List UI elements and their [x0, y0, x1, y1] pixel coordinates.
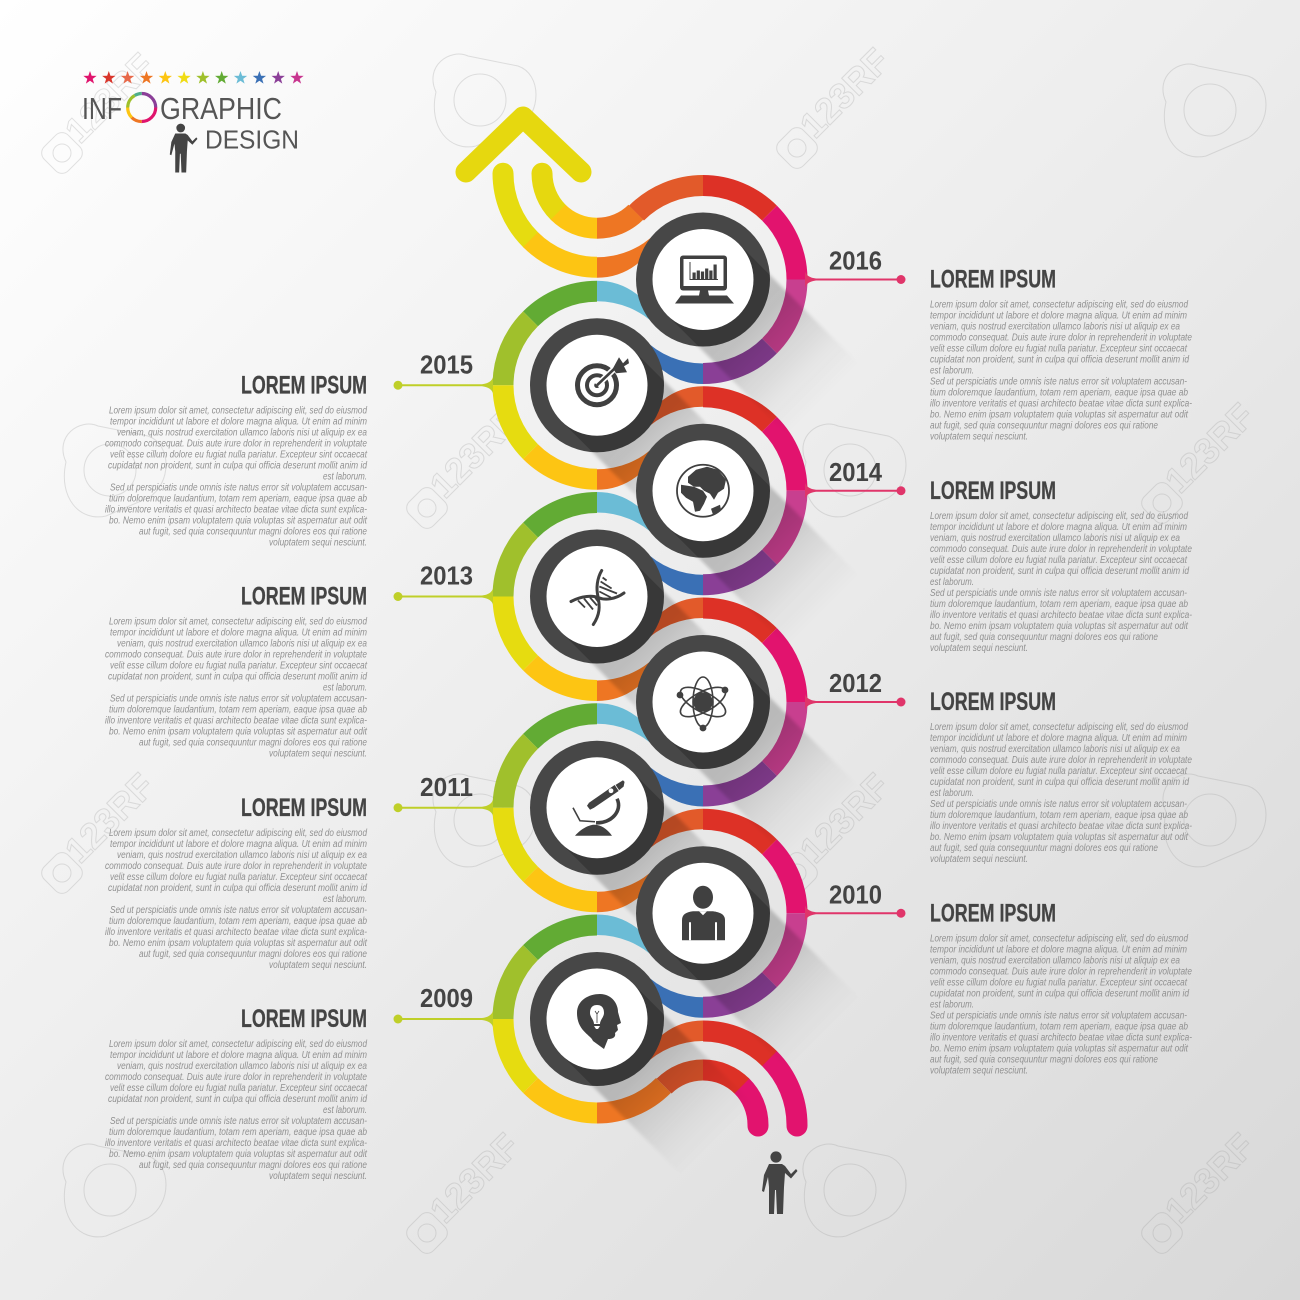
heading 2014: LOREM IPSUM: [930, 477, 1056, 505]
circle: 2011: [530, 741, 689, 900]
body text 2009: tium doloremque laudantium, totam rem aperiam, eaque ipsa quae ab: [109, 1127, 367, 1138]
connector 2010: [805, 905, 906, 921]
body text 2013: [105, 616, 368, 760]
body text 2014: [930, 511, 1193, 654]
ribbon loop 2011: [503, 714, 650, 902]
body text 2011: illo inventore veritatis et quasi architecto beatae vitae dicta sunt explica-: [105, 927, 368, 938]
watermark stamps: 123RF: [1157, 395, 1262, 501]
body text 2013: Sed ut perspiciatis unde omnis iste natus error sit voluptatem accusan-: [110, 694, 368, 704]
body text 2011: [105, 828, 368, 971]
heading 2009: LOREM IPSUM: [241, 1005, 367, 1033]
body text 2015: bo. Nemo enim ipsam voluptatem quia voluptas sit aspernatur aut odit: [109, 515, 368, 526]
body text 2016: tium doloremque laudantium, totam rem aperiam, eaque ipsa quae ab: [930, 388, 1188, 398]
logo word DESIGN: DESIGN: [205, 124, 299, 154]
watermark stamps: 123RF: [422, 1125, 527, 1231]
logo rainbow O: [128, 94, 156, 122]
body text 2015: veniam, quis nostrud exercitation ullamco laboris nisi ut aliquip ex ea: [117, 427, 367, 438]
body text 2009: Lorem ipsum dolor sit amet, consectetur adipiscing elit, sed do eiusmod: [109, 1039, 367, 1050]
body text 2011: velit esse cillum dolore eu fugiat nulla pariatur. Excepteur sint occaecat: [110, 872, 368, 883]
body text 2014: aut fugit, sed quia consequuntur magni dolores eos qui ratione: [930, 632, 1158, 643]
icon: globe: [677, 465, 729, 517]
icon: dna helix: [571, 570, 624, 624]
body text 2012: commodo consequat. Duis aute irure dolor in reprehenderit in voluptate: [930, 755, 1192, 766]
ribbon loop 2010: [650, 819, 797, 1007]
body text 2009: aut fugit, sed quia consequuntur magni dolores eos qui ratione: [139, 1160, 367, 1171]
connector 2016: [805, 272, 906, 288]
body text 2013: veniam, quis nostrud exercitation ullamco laboris nisi ut aliquip ex ea: [117, 638, 367, 650]
body text 2016: est laborum.: [930, 366, 974, 376]
body text 2013: tium doloremque laudantium, totam rem aperiam, eaque ipsa quae ab: [109, 704, 367, 716]
body text 2009: velit esse cillum dolore eu fugiat nulla pariatur. Excepteur sint occaecat: [110, 1083, 368, 1094]
body text 2010: voluptatem sequi nesciunt.: [930, 1065, 1028, 1076]
body text 2011: voluptatem sequi nesciunt.: [269, 960, 367, 971]
body text 2013: velit esse cillum dolore eu fugiat nulla pariatur. Excepteur sint occaecat: [110, 660, 368, 672]
body text 2014: est laborum.: [930, 577, 974, 588]
body text 2011: Lorem ipsum dolor sit amet, consectetur adipiscing elit, sed do eiusmod: [109, 828, 367, 839]
body text 2014: velit esse cillum dolore eu fugiat nulla pariatur. Excepteur sint occaecat: [930, 555, 1188, 566]
body text 2015: voluptatem sequi nesciunt.: [269, 537, 367, 548]
body text 2009: commodo consequat. Duis aute irure dolor in reprehenderit in voluptate: [105, 1072, 367, 1083]
body text 2014: bo. Nemo enim ipsam voluptatem quia voluptas sit aspernatur aut odit: [930, 621, 1189, 632]
body text 2016: aut fugit, sed quia consequuntur magni dolores eos qui ratione: [930, 420, 1158, 432]
body text 2016: veniam, quis nostrud exercitation ullamco laboris nisi ut aliquip ex ea: [930, 322, 1180, 332]
panel: 2012: [805, 668, 1193, 865]
body text 2012: bo. Nemo enim ipsam voluptatem quia voluptas sit aspernatur aut odit: [930, 832, 1189, 843]
body text 2012: Lorem ipsum dolor sit amet, consectetur adipiscing elit, sed do eiusmod: [930, 722, 1188, 733]
body text 2011: cupidatat non proident, sunt in culpa qui officia deserunt mollit anim id: [108, 883, 367, 894]
body text 2013: illo inventore veritatis et quasi architecto beatae vitae dicta sunt explica-: [105, 716, 368, 726]
body text 2011: commodo consequat. Duis aute irure dolor in reprehenderit in voluptate: [105, 861, 367, 872]
heading 2016: LOREM IPSUM: [930, 266, 1056, 294]
body text 2016: Sed ut perspiciatis unde omnis iste natus error sit voluptatem accusan-: [930, 376, 1188, 388]
body text 2009: bo. Nemo enim ipsam voluptatem quia voluptas sit aspernatur aut odit: [109, 1149, 368, 1160]
icon: atom: [676, 677, 730, 731]
body text 2016: velit esse cillum dolore eu fugiat nulla pariatur. Excepteur sint occaecat: [930, 344, 1188, 354]
body text 2009: est laborum.: [323, 1105, 367, 1116]
body text 2016: Lorem ipsum dolor sit amet, consectetur adipiscing elit, sed do eiusmod: [930, 300, 1188, 310]
body text 2016: tempor incididunt ut labore et dolore magna aliqua. Ut enim ad minim: [930, 310, 1187, 322]
body text 2010: bo. Nemo enim ipsam voluptatem quia voluptas sit aspernatur aut odit: [930, 1043, 1189, 1054]
watermark stamps: 123RF: [422, 400, 527, 506]
circle: 2012: [636, 635, 795, 794]
body text 2015: [105, 405, 368, 548]
body text 2015: velit esse cillum dolore eu fugiat nulla pariatur. Excepteur sint occaecat: [110, 449, 368, 460]
panel: 2013: [105, 560, 493, 760]
icon: head with light bulb: [577, 994, 621, 1049]
watermark stamps: 123RF: [792, 765, 897, 871]
panel: 2009: [105, 983, 493, 1182]
body text 2015: commodo consequat. Duis aute irure dolor in reprehenderit in voluptate: [105, 438, 367, 449]
logo word GRAPHIC: GRAPHIC: [160, 91, 282, 126]
year 2016: 2016: [829, 246, 882, 276]
body text 2016: cupidatat non proident, sunt in culpa qui officia deserunt mollit anim id: [930, 354, 1189, 366]
body text 2016: commodo consequat. Duis aute irure dolor in reprehenderit in voluptate: [930, 332, 1192, 344]
body text 2015: Lorem ipsum dolor sit amet, consectetur adipiscing elit, sed do eiusmod: [109, 405, 367, 416]
logo: infographic design: [82, 71, 304, 172]
body text 2013: est laborum.: [323, 682, 367, 694]
logo figure: [170, 124, 197, 172]
year 2009: 2009: [420, 983, 473, 1013]
bottom tail strands: [650, 1031, 797, 1126]
body text 2012: veniam, quis nostrud exercitation ullamco laboris nisi ut aliquip ex ea: [930, 744, 1180, 755]
ribbon loop 2016: [637, 186, 797, 374]
circle: 2015: [530, 318, 689, 478]
body text 2013: cupidatat non proident, sunt in culpa qui officia deserunt mollit anim id: [108, 672, 367, 682]
body text 2010: [930, 933, 1193, 1076]
body text 2012: tempor incididunt ut labore et dolore magna aliqua. Ut enim ad minim: [930, 733, 1187, 744]
logo stars: [83, 71, 304, 84]
connector 2009: [394, 1011, 493, 1027]
circle: 2013: [530, 530, 689, 689]
watermark stamps: 123RF: [792, 40, 897, 146]
body text 2010: tium doloremque laudantium, totam rem aperiam, eaque ipsa quae ab: [930, 1021, 1188, 1032]
body text 2011: est laborum.: [323, 894, 367, 905]
connector 2013: [394, 588, 493, 604]
heading 2013: LOREM IPSUM: [241, 582, 367, 610]
body text 2016: bo. Nemo enim ipsam voluptatem quia voluptas sit aspernatur aut odit: [930, 410, 1189, 420]
ribbon timeline: [503, 173, 797, 1126]
body text 2015: est laborum.: [323, 471, 367, 482]
connector 2015: [394, 377, 493, 393]
body text 2014: voluptatem sequi nesciunt.: [930, 643, 1028, 654]
connector 2011: [394, 800, 493, 816]
heading 2011: LOREM IPSUM: [241, 794, 367, 822]
body text 2011: tium doloremque laudantium, totam rem aperiam, eaque ipsa quae ab: [109, 916, 367, 927]
icon: monitor with chart: [675, 256, 734, 304]
body text 2014: Lorem ipsum dolor sit amet, consectetur adipiscing elit, sed do eiusmod: [930, 511, 1188, 522]
heading 2015: LOREM IPSUM: [241, 371, 367, 399]
body text 2009: tempor incididunt ut labore et dolore magna aliqua. Ut enim ad minim: [110, 1050, 367, 1061]
body text 2013: tempor incididunt ut labore et dolore magna aliqua. Ut enim ad minim: [110, 628, 367, 638]
body text 2014: Sed ut perspiciatis unde omnis iste natus error sit voluptatem accusan-: [930, 588, 1188, 599]
body text 2010: tempor incididunt ut labore et dolore magna aliqua. Ut enim ad minim: [930, 944, 1187, 955]
body text 2016: voluptatem sequi nesciunt.: [930, 432, 1028, 442]
body text 2016: [930, 300, 1193, 442]
body text 2015: tium doloremque laudantium, totam rem aperiam, eaque ipsa quae ab: [109, 493, 367, 504]
body text 2014: cupidatat non proident, sunt in culpa qui officia deserunt mollit anim id: [930, 566, 1189, 577]
body text 2014: tium doloremque laudantium, totam rem aperiam, eaque ipsa quae ab: [930, 599, 1188, 610]
body text 2015: cupidatat non proident, sunt in culpa qui officia deserunt mollit anim id: [108, 460, 367, 471]
year 2010: 2010: [829, 879, 882, 909]
body text 2009: cupidatat non proident, sunt in culpa qui officia deserunt mollit anim id: [108, 1094, 367, 1105]
body text 2010: Lorem ipsum dolor sit amet, consectetur adipiscing elit, sed do eiusmod: [930, 933, 1188, 944]
heading 2012: LOREM IPSUM: [930, 688, 1056, 716]
arrow head: [466, 117, 581, 172]
body text 2010: cupidatat non proident, sunt in culpa qui officia deserunt mollit anim id: [930, 988, 1189, 999]
circle: 2016: [636, 212, 795, 372]
body text 2013: commodo consequat. Duis aute irure dolor in reprehenderit in voluptate: [105, 650, 367, 660]
circle: 2009: [530, 952, 689, 1111]
body text 2010: est laborum.: [930, 999, 974, 1010]
body text 2015: Sed ut perspiciatis unde omnis iste natus error sit voluptatem accusan-: [110, 482, 368, 493]
ribbon loop 2013: [503, 502, 650, 690]
body text 2014: tempor incididunt ut labore et dolore magna aliqua. Ut enim ad minim: [930, 522, 1187, 533]
icon: target with arrow: [578, 357, 629, 405]
body text 2010: veniam, quis nostrud exercitation ullamco laboris nisi ut aliquip ex ea: [930, 955, 1180, 966]
body text 2012: Sed ut perspiciatis unde omnis iste natus error sit voluptatem accusan-: [930, 799, 1188, 810]
body text 2010: illo inventore veritatis et quasi architecto beatae vitae dicta sunt explica-: [930, 1032, 1193, 1043]
body text 2010: Sed ut perspiciatis unde omnis iste natus error sit voluptatem accusan-: [930, 1010, 1188, 1021]
panel: 2014: [805, 457, 1193, 654]
panel: 2015: [105, 349, 493, 548]
circle: 2014: [636, 424, 795, 583]
bottom person figure: [762, 1151, 798, 1214]
body text 2013: bo. Nemo enim ipsam voluptatem quia voluptas sit aspernatur aut odit: [109, 726, 368, 738]
body text 2013: Lorem ipsum dolor sit amet, consectetur adipiscing elit, sed do eiusmod: [109, 616, 367, 628]
icon: microscope: [573, 780, 625, 836]
watermark stamps: 123RF: [1157, 1125, 1262, 1231]
ribbon loop 2009: [503, 925, 663, 1113]
body text 2015: illo inventore veritatis et quasi architecto beatae vitae dicta sunt explica-: [105, 504, 368, 515]
body text 2015: tempor incididunt ut labore et dolore magna aliqua. Ut enim ad minim: [110, 416, 367, 427]
body text 2012: illo inventore veritatis et quasi architecto beatae vitae dicta sunt explica-: [930, 821, 1193, 832]
body text 2012: tium doloremque laudantium, totam rem aperiam, eaque ipsa quae ab: [930, 810, 1188, 821]
connector 2014: [805, 483, 906, 499]
ribbon loop 2014: [650, 397, 797, 585]
year 2014: 2014: [829, 457, 882, 487]
ribbon loop 2012: [650, 608, 797, 796]
body text 2010: aut fugit, sed quia consequuntur magni dolores eos qui ratione: [930, 1054, 1158, 1065]
body text 2016: illo inventore veritatis et quasi architecto beatae vitae dicta sunt explica-: [930, 398, 1193, 410]
long shadows: [561, 244, 859, 1175]
body text 2014: illo inventore veritatis et quasi architecto beatae vitae dicta sunt explica-: [930, 610, 1193, 621]
body text 2010: commodo consequat. Duis aute irure dolor in reprehenderit in voluptate: [930, 966, 1192, 977]
circle: 2010: [636, 846, 795, 1006]
year 2011: 2011: [420, 772, 473, 802]
body text 2012: est laborum.: [930, 788, 974, 799]
year 2012: 2012: [829, 668, 882, 698]
body text 2011: tempor incididunt ut labore et dolore magna aliqua. Ut enim ad minim: [110, 839, 367, 850]
body text 2013: voluptatem sequi nesciunt.: [269, 748, 367, 760]
body text 2009: illo inventore veritatis et quasi architecto beatae vitae dicta sunt explica-: [105, 1138, 368, 1149]
body text 2009: voluptatem sequi nesciunt.: [269, 1171, 367, 1182]
body text 2012: velit esse cillum dolore eu fugiat nulla pariatur. Excepteur sint occaecat: [930, 766, 1188, 777]
body text 2010: velit esse cillum dolore eu fugiat nulla pariatur. Excepteur sint occaecat: [930, 977, 1188, 988]
watermark stamps: 123RF: [57, 45, 162, 151]
body text 2013: aut fugit, sed quia consequuntur magni dolores eos qui ratione: [139, 738, 367, 748]
body text 2009: Sed ut perspiciatis unde omnis iste natus error sit voluptatem accusan-: [110, 1116, 368, 1127]
body text 2014: veniam, quis nostrud exercitation ullamco laboris nisi ut aliquip ex ea: [930, 533, 1180, 544]
body text 2012: cupidatat non proident, sunt in culpa qui officia deserunt mollit anim id: [930, 777, 1189, 788]
body text 2015: aut fugit, sed quia consequuntur magni dolores eos qui ratione: [139, 526, 367, 537]
ribbon loop 2015: [503, 291, 650, 479]
body text 2011: aut fugit, sed quia consequuntur magni dolores eos qui ratione: [139, 949, 367, 960]
year 2015: 2015: [420, 349, 473, 379]
panel: 2016: [805, 246, 1193, 442]
heading 2010: LOREM IPSUM: [930, 899, 1056, 927]
body text 2011: veniam, quis nostrud exercitation ullamco laboris nisi ut aliquip ex ea: [117, 850, 367, 861]
connector 2012: [805, 694, 906, 710]
logo word INF: INF: [82, 91, 122, 126]
body text 2012: aut fugit, sed quia consequuntur magni dolores eos qui ratione: [930, 843, 1158, 854]
body text 2014: commodo consequat. Duis aute irure dolor in reprehenderit in voluptate: [930, 544, 1192, 555]
year 2013: 2013: [420, 560, 473, 590]
top tail outer strand: [503, 173, 650, 267]
watermark stamps: 123RF: [57, 765, 162, 871]
top tail inner strand: [542, 173, 636, 228]
panel: 2010: [805, 879, 1193, 1076]
body text 2011: Sed ut perspiciatis unde omnis iste natus error sit voluptatem accusan-: [110, 905, 368, 916]
body text 2012: voluptatem sequi nesciunt.: [930, 854, 1028, 865]
body text 2011: bo. Nemo enim ipsam voluptatem quia voluptas sit aspernatur aut odit: [109, 938, 368, 949]
body text 2009: [105, 1039, 368, 1182]
panel: 2011: [105, 772, 493, 971]
body text 2012: [930, 722, 1193, 865]
icon: business person: [682, 886, 725, 940]
body text 2009: veniam, quis nostrud exercitation ullamco laboris nisi ut aliquip ex ea: [117, 1061, 367, 1072]
